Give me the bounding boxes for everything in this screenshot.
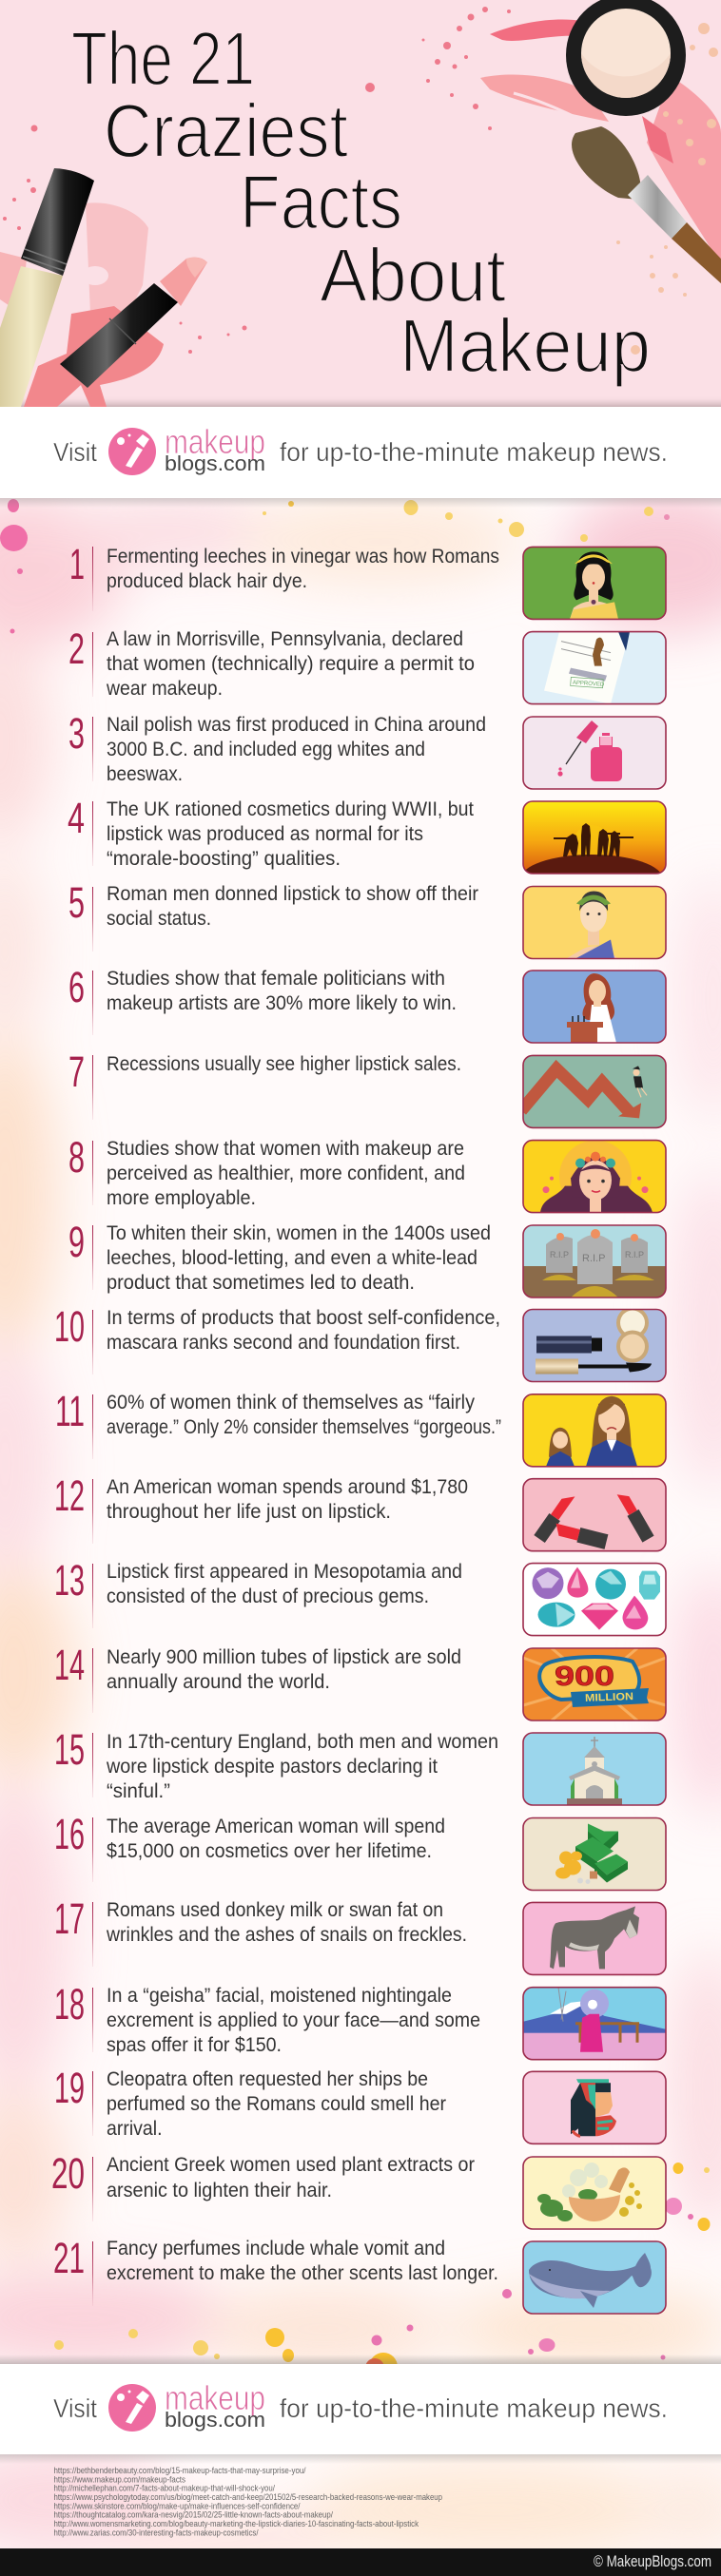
- top banner: [0, 407, 721, 498]
- icon: cleopatra: [523, 2071, 666, 2143]
- icon: approved stamp: [523, 632, 666, 704]
- number: 6: [68, 963, 85, 1011]
- fact 11: [55, 1387, 666, 1467]
- fact 14: [54, 1641, 666, 1721]
- icon: gems: [523, 1564, 666, 1636]
- text: visit: Visit: [53, 2393, 97, 2423]
- fact 19: [54, 2064, 666, 2143]
- fact 15: [54, 1725, 666, 1805]
- icon: falling chart arrow: [521, 1055, 666, 1127]
- text: [107, 798, 474, 870]
- paint swatches lower left: [0, 125, 247, 407]
- hero panel: [0, 0, 721, 407]
- text: [107, 1985, 480, 2056]
- number: 18: [54, 1980, 85, 2028]
- text: spas offer it for $150.: [107, 2034, 282, 2056]
- text: visit: Visit: [53, 437, 97, 467]
- title: [71, 16, 651, 388]
- number: 17: [54, 1894, 85, 1943]
- fact 13: [54, 1556, 666, 1636]
- text: leeches, blood-letting, and even a white-lead: [107, 1247, 477, 1269]
- text: [106, 1731, 498, 1802]
- icon: mascara and compacts: [523, 1306, 666, 1382]
- text: Fermenting leeches in vinegar was how Romans: [107, 546, 499, 567]
- text: logo wordmark: blogs.com: [165, 2408, 265, 2432]
- number: 16: [54, 1810, 85, 1858]
- source references: http://www.zarias.com/30-interesting-facts-makeup-cosmetics/: [53, 2528, 259, 2538]
- text: produced black hair dye.: [107, 570, 307, 592]
- text: [107, 546, 499, 592]
- text: lipstick was produced as normal for its: [107, 823, 423, 845]
- text: [107, 1307, 500, 1354]
- text: In terms of products that boost self-confidence,: [107, 1307, 500, 1329]
- text: Roman men donned lipstick to show off their: [107, 883, 478, 905]
- text: 60% of women think of themselves as “fairly: [107, 1392, 475, 1413]
- text: [107, 1476, 468, 1523]
- number: 1: [69, 540, 85, 588]
- fact 4: [68, 800, 667, 875]
- number: 10: [54, 1302, 85, 1351]
- text: perfumed so the Romans could smell her: [107, 2093, 446, 2115]
- text: [107, 968, 457, 1014]
- text: [107, 2068, 446, 2140]
- fact 7: [68, 1048, 666, 1127]
- text: Cleopatra often requested her ships be: [107, 2068, 428, 2090]
- fact 17: [54, 1894, 666, 1974]
- text: Studies show that female politicians with: [107, 968, 445, 990]
- icon: whale: [523, 2241, 666, 2314]
- text: In a “geisha” facial, moistened nightingale: [107, 1985, 452, 2007]
- title: Facts: [240, 160, 402, 244]
- fact 20: [51, 2149, 666, 2229]
- text: Lipstick first appeared in Mesopotamia and: [107, 1561, 462, 1583]
- icon: money stacks: [523, 1817, 666, 1890]
- icon: donkey: [523, 1902, 666, 1974]
- title: Craziest: [104, 88, 348, 173]
- text: more employable.: [107, 1187, 256, 1209]
- fact 2: [68, 625, 666, 704]
- text: wrinkles and the ashes of snails on freckles.: [106, 1924, 467, 1946]
- text: Nearly 900 million tubes of lipstick are sold: [107, 1646, 461, 1668]
- text: [107, 1392, 501, 1438]
- text: “morale-boosting” qualities.: [107, 848, 341, 870]
- number: 13: [54, 1556, 85, 1605]
- icon: powder compact: [566, 0, 686, 116]
- text: [106, 1899, 467, 1946]
- number: 20: [51, 2149, 85, 2198]
- text: Fancy perfumes include whale vomit and: [107, 2238, 445, 2259]
- text: logo wordmark: makeup: [165, 2378, 265, 2417]
- number: 14: [54, 1641, 85, 1689]
- text: A law in Morrisville, Pennsylvania, declared: [107, 628, 463, 650]
- text: throughout her life just on lipstick.: [107, 1501, 391, 1523]
- text: arsenic to lighten their hair.: [107, 2180, 332, 2201]
- text: $15,000 on cosmetics over her lifetime.: [107, 1840, 432, 1862]
- number: 5: [68, 878, 85, 927]
- icon: two women: [523, 1394, 666, 1467]
- icon: 900 million badge: 900: [555, 1662, 614, 1692]
- paint swatches top right: [365, 7, 721, 355]
- icon: politician at podium: [523, 971, 666, 1043]
- text: [107, 1222, 491, 1294]
- text: [107, 1561, 462, 1607]
- fact 8: [68, 1133, 666, 1213]
- source references: https://www.makeup.com/makeup-facts: [53, 2474, 185, 2485]
- text: consisted of the dust of precious gems.: [107, 1586, 429, 1607]
- text: Nail polish was first produced in China around: [107, 714, 486, 736]
- text: Recessions usually see higher lipstick sales.: [107, 1053, 461, 1075]
- source references: https://www.skinstore.com/blog/make-up/make-influences-self-confidence/: [53, 2501, 301, 2511]
- icon: roman woman: [523, 547, 666, 619]
- icon: geisha and mountain: [523, 1988, 666, 2060]
- icon: graves: R.I.P: [625, 1250, 644, 1259]
- fact 9: [68, 1218, 666, 1298]
- text: logo wordmark: blogs.com: [165, 452, 265, 475]
- text: To whiten their skin, women in the 1400s used: [107, 1222, 491, 1244]
- fact 6: [68, 963, 666, 1043]
- icon: confident woman: [523, 1141, 666, 1213]
- icon: three lipsticks: [523, 1479, 666, 1551]
- fact 16: [54, 1810, 666, 1890]
- icon: church: [523, 1733, 666, 1805]
- fact 10: [54, 1302, 666, 1382]
- icon: makeupblogs logo: [108, 2384, 156, 2432]
- number: 15: [54, 1725, 85, 1774]
- icon: 900 million badge: [523, 1648, 666, 1721]
- text: [107, 714, 486, 785]
- decorative paint dots, top: [0, 499, 670, 633]
- text: arrival.: [107, 2118, 162, 2140]
- number: 21: [53, 2234, 85, 2282]
- text: The UK rationed cosmetics during WWII, but: [107, 798, 474, 820]
- text: [107, 1646, 461, 1693]
- text: wear makeup.: [106, 678, 223, 700]
- text: In 17th-century England, both men and women: [107, 1731, 498, 1753]
- bottom banner: [0, 2364, 721, 2454]
- icon: approved stamp: APPROVED: [573, 681, 605, 688]
- text: “sinful.”: [107, 1780, 170, 1802]
- number: 7: [68, 1048, 85, 1096]
- source references: https://bethbenderbeauty.com/blog/15-makeup-facts-that-may-surprise-you/: [53, 2466, 306, 2476]
- text: logo wordmark: makeup: [165, 422, 265, 461]
- icon: graves: R.I.P: [582, 1253, 605, 1264]
- fact 5: [68, 878, 666, 958]
- text: [107, 1816, 445, 1862]
- fact 12: [54, 1471, 666, 1551]
- title: Makeup: [399, 303, 651, 388]
- text: social status.: [107, 908, 211, 930]
- text: makeup artists are 30% more likely to win.: [107, 992, 457, 1014]
- icon: makeup brush: [572, 126, 721, 285]
- text: Romans used donkey milk or swan fat on: [107, 1899, 443, 1921]
- text: annually around the world.: [107, 1671, 330, 1693]
- text: [107, 883, 478, 930]
- text: Studies show that women with makeup are: [107, 1138, 464, 1160]
- text: product that sometimes led to death.: [107, 1272, 415, 1294]
- decorative paint dots, bottom: [54, 2163, 710, 2381]
- text: logo wordmark: [165, 422, 265, 475]
- source references: http://www.womensmarketing.com/blog/beauty-marketing-the-lipstick-diaries-10-fascinating-facts-about-lipstick: [53, 2519, 419, 2529]
- icon: nail polish: [523, 717, 666, 789]
- number: 2: [68, 625, 85, 673]
- icon: lip gloss tube: [0, 168, 94, 407]
- icon: lipstick: [60, 258, 207, 388]
- fact 18: [54, 1980, 666, 2060]
- fact 1: [69, 540, 666, 619]
- icon: graves: R.I.P: [550, 1250, 569, 1259]
- text: beeswax.: [107, 763, 183, 785]
- text: tagline: for up-to-the-minute makeup news.: [280, 437, 668, 467]
- number: 11: [55, 1387, 85, 1435]
- title: The 21: [71, 16, 255, 101]
- text: perceived as healthier, more confident, and: [107, 1163, 465, 1184]
- source references: http://michellephan.com/7-facts-about-makeup-that-will-shock-you/: [53, 2484, 275, 2494]
- number: 12: [54, 1471, 85, 1520]
- text: mascara ranks second and foundation first.: [107, 1332, 460, 1354]
- number: 19: [54, 2064, 85, 2112]
- title: About: [320, 233, 506, 317]
- source references: [53, 2466, 442, 2538]
- icon: 900 million badge: MILLION: [585, 1691, 633, 1704]
- text: The average American woman will spend: [107, 1816, 445, 1837]
- text: 3000 B.C. and included egg whites and: [107, 739, 425, 760]
- fact 3: [68, 709, 666, 789]
- text: [107, 2238, 498, 2284]
- icon: soldiers silhouette: [522, 800, 667, 875]
- text: [106, 628, 475, 700]
- icon: graves: [523, 1225, 666, 1298]
- text: wore lipstick despite pastors declaring it: [106, 1756, 438, 1778]
- number: 3: [68, 709, 85, 758]
- source references: https://thoughtcatalog.com/kara-nesvig/2015/02/25-little-known-facts-about-makeup/: [53, 2510, 333, 2521]
- text: tagline: for up-to-the-minute makeup news.: [280, 2393, 668, 2423]
- text: Ancient Greek women used plant extracts or: [107, 2154, 475, 2176]
- text: [107, 1138, 465, 1209]
- text: logo wordmark: [165, 2378, 265, 2432]
- icon: roman man: [523, 886, 666, 958]
- text: [107, 2154, 475, 2201]
- number: 4: [68, 794, 85, 842]
- text: that women (technically) require a permit to: [107, 653, 475, 675]
- icon: mortar and herbs: [523, 2157, 666, 2229]
- icon: makeupblogs logo: [108, 428, 156, 475]
- source references: https://www.psychologytoday.com/us/blog/meet-catch-and-keep/201502/5-research-backed-reasons-we-wear-makeup: [53, 2492, 442, 2503]
- fact 21: [53, 2234, 666, 2314]
- text: excrement is applied to your face—and some: [107, 2009, 480, 2031]
- number: 8: [68, 1133, 85, 1182]
- text: excrement to make the other scents last longer.: [107, 2262, 498, 2284]
- footer bar: [0, 2548, 721, 2576]
- text: An American woman spends around $1,780: [107, 1476, 468, 1498]
- text: average.” Only 2% consider themselves “gorgeous.”: [107, 1416, 501, 1438]
- number: 9: [68, 1218, 85, 1266]
